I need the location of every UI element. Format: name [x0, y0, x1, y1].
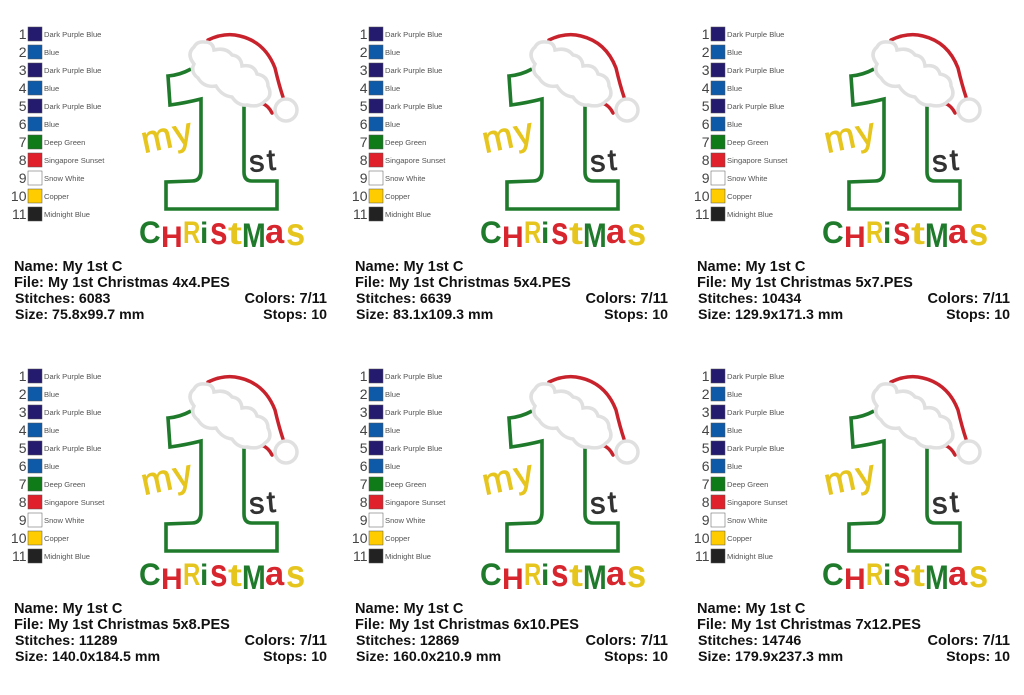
colour legend: Singapore Sunset: [385, 498, 446, 507]
embroidery artwork: H: [161, 563, 183, 596]
embroidery artwork: a: [606, 213, 626, 251]
colour legend: 1: [360, 368, 368, 384]
design details: Colors: 7/11: [245, 633, 327, 649]
design details: Stops: 10: [604, 307, 668, 323]
colour legend: Snow White: [44, 516, 85, 525]
colour legend: Blue: [44, 390, 59, 399]
colour legend: 3: [19, 62, 27, 78]
colour legend: 6: [702, 116, 710, 132]
embroidery artwork: R: [183, 215, 200, 250]
design details: [14, 259, 327, 323]
colour legend: 11: [695, 548, 710, 564]
colour legend: 7: [702, 476, 710, 492]
design details: File: My 1st Christmas 7x12.PES: [697, 617, 921, 633]
embroidery artwork: s: [627, 552, 646, 595]
design details: Size: 179.9x237.3 mm: [698, 649, 843, 665]
colour legend: Deep Green: [727, 138, 768, 147]
colour legend: Dark Purple Blue: [385, 66, 442, 75]
design details: Size: 129.9x171.3 mm: [698, 307, 843, 323]
design details: Colors: 7/11: [586, 291, 668, 307]
embroidery artwork: t: [569, 215, 583, 251]
colour legend: 5: [360, 440, 368, 456]
embroidery artwork: t: [911, 215, 925, 251]
panel: design 5x4: [352, 26, 668, 323]
design details: [697, 601, 1010, 665]
colour legend: Midnight Blue: [385, 552, 431, 561]
embroidery artwork: R: [524, 557, 541, 592]
colour legend: 8: [19, 152, 27, 168]
colour legend: [11, 368, 105, 564]
colour legend: Blue: [385, 48, 400, 57]
embroidery artwork: s: [969, 210, 988, 253]
design details: Stitches: 10434: [698, 291, 801, 307]
embroidery artwork: C: [480, 214, 502, 250]
colour legend: Snow White: [385, 516, 426, 525]
design details: File: My 1st Christmas 5x7.PES: [697, 275, 913, 291]
colour legend: 3: [360, 404, 368, 420]
colour legend: Dark Purple Blue: [385, 30, 442, 39]
colour legend: Dark Purple Blue: [44, 30, 101, 39]
design details: Name: My 1st C: [14, 259, 123, 275]
embroidery artwork: i: [883, 559, 891, 592]
embroidery artwork: t: [911, 557, 925, 593]
embroidery artwork: my: [478, 452, 539, 503]
design details: [355, 601, 668, 665]
embroidery artwork: s: [286, 210, 305, 253]
embroidery artwork: C: [139, 556, 161, 592]
design details: Stops: 10: [604, 649, 668, 665]
embroidery artwork: M: [583, 215, 607, 255]
embroidery artwork: my: [478, 110, 539, 161]
design details: Colors: 7/11: [928, 291, 1010, 307]
colour legend: Blue: [44, 84, 59, 93]
embroidery artwork: s: [210, 551, 228, 595]
colour legend: Blue: [727, 48, 742, 57]
colour legend: 10: [11, 530, 27, 546]
colour legend: Blue: [385, 426, 400, 435]
colour legend: 5: [702, 440, 710, 456]
colour legend: 4: [360, 80, 368, 96]
colour legend: 8: [702, 152, 710, 168]
colour legend: 9: [702, 170, 710, 186]
colour legend: Dark Purple Blue: [44, 102, 101, 111]
embroidery artwork: [478, 377, 646, 597]
colour legend: Blue: [727, 120, 742, 129]
embroidery artwork: i: [883, 217, 891, 250]
embroidery artwork: i: [541, 217, 549, 250]
colour legend: 4: [702, 422, 710, 438]
embroidery artwork: t: [228, 557, 242, 593]
colour legend: Dark Purple Blue: [727, 444, 784, 453]
colour legend: Blue: [385, 120, 400, 129]
colour legend: Midnight Blue: [727, 210, 773, 219]
colour legend: Dark Purple Blue: [44, 444, 101, 453]
colour legend: 5: [19, 98, 27, 114]
embroidery artwork: [820, 35, 988, 255]
colour legend: 1: [19, 26, 27, 42]
embroidery artwork: s: [551, 209, 569, 253]
embroidery artwork: R: [866, 215, 883, 250]
embroidery artwork: t: [569, 557, 583, 593]
embroidery artwork: i: [200, 217, 208, 250]
design details: File: My 1st Christmas 5x8.PES: [14, 617, 230, 633]
colour legend: Dark Purple Blue: [385, 408, 442, 417]
embroidery artwork: R: [524, 215, 541, 250]
colour legend: Singapore Sunset: [44, 156, 105, 165]
colour legend: 3: [702, 404, 710, 420]
colour legend: 8: [360, 494, 368, 510]
colour legend: Midnight Blue: [727, 552, 773, 561]
design details: File: My 1st Christmas 6x10.PES: [355, 617, 579, 633]
colour legend: 1: [360, 26, 368, 42]
colour legend: [694, 368, 788, 564]
colour legend: 8: [702, 494, 710, 510]
colour legend: 6: [360, 458, 368, 474]
colour legend: 7: [360, 476, 368, 492]
colour legend: Blue: [385, 390, 400, 399]
embroidery artwork: st: [931, 144, 963, 179]
colour legend: Deep Green: [44, 138, 85, 147]
colour legend: Dark Purple Blue: [44, 372, 101, 381]
colour legend: 6: [702, 458, 710, 474]
embroidery artwork: s: [627, 210, 646, 253]
colour legend: Deep Green: [385, 138, 426, 147]
colour legend: Snow White: [385, 174, 426, 183]
colour legend: Blue: [727, 390, 742, 399]
colour legend: Dark Purple Blue: [385, 444, 442, 453]
embroidery artwork: C: [480, 556, 502, 592]
colour legend: Dark Purple Blue: [385, 372, 442, 381]
colour legend: Dark Purple Blue: [44, 408, 101, 417]
embroidery artwork: t: [228, 215, 242, 251]
colour legend: [694, 26, 788, 222]
colour legend: 5: [19, 440, 27, 456]
colour legend: 2: [360, 44, 368, 60]
embroidery artwork: my: [137, 452, 198, 503]
colour legend: Deep Green: [44, 480, 85, 489]
colour legend: Midnight Blue: [44, 552, 90, 561]
colour legend: 8: [360, 152, 368, 168]
colour legend: Singapore Sunset: [44, 498, 105, 507]
embroidery artwork: [137, 35, 305, 255]
embroidery artwork: s: [286, 552, 305, 595]
colour legend: Blue: [727, 84, 742, 93]
colour legend: Singapore Sunset: [727, 498, 788, 507]
embroidery artwork: [137, 377, 305, 597]
colour legend: Copper: [385, 534, 410, 543]
embroidery artwork: i: [541, 559, 549, 592]
colour legend: Copper: [44, 192, 69, 201]
design details: [14, 601, 327, 665]
colour legend: Dark Purple Blue: [727, 372, 784, 381]
design details: Stitches: 6639: [356, 291, 452, 307]
design details: Stitches: 11289: [15, 633, 118, 649]
panel: design 6x10: [352, 368, 668, 665]
panel: design 5x7: [694, 26, 1010, 323]
embroidery artwork: [478, 35, 646, 255]
colour legend: 9: [19, 512, 27, 528]
embroidery artwork: a: [948, 555, 968, 593]
colour legend: Dark Purple Blue: [385, 102, 442, 111]
colour legend: 6: [19, 458, 27, 474]
colour legend: Midnight Blue: [44, 210, 90, 219]
embroidery artwork: R: [866, 557, 883, 592]
colour legend: Blue: [44, 462, 59, 471]
colour legend: Dark Purple Blue: [727, 102, 784, 111]
colour legend: 9: [19, 170, 27, 186]
design details: Name: My 1st C: [355, 601, 464, 617]
panel: design 5x8: [11, 368, 327, 665]
embroidery artwork: M: [925, 215, 949, 255]
colour legend: Copper: [727, 534, 752, 543]
design details: Size: 83.1x109.3 mm: [356, 307, 493, 323]
colour legend: 10: [694, 530, 710, 546]
design details: Stops: 10: [946, 307, 1010, 323]
colour legend: 1: [19, 368, 27, 384]
embroidery artwork: st: [248, 486, 280, 521]
colour legend: Singapore Sunset: [727, 156, 788, 165]
embroidery artwork: i: [200, 559, 208, 592]
colour legend: 7: [19, 134, 27, 150]
colour legend: 11: [12, 206, 27, 222]
design details: Stops: 10: [263, 649, 327, 665]
panel: design 7x12: [694, 368, 1010, 665]
colour legend: Blue: [44, 48, 59, 57]
colour legend: 1: [702, 368, 710, 384]
colour legend: 3: [19, 404, 27, 420]
colour legend: 10: [11, 188, 27, 204]
colour legend: 9: [702, 512, 710, 528]
design details: Stitches: 14746: [698, 633, 801, 649]
colour legend: [352, 26, 446, 222]
embroidery artwork: H: [502, 563, 524, 596]
embroidery artwork: M: [925, 557, 949, 597]
embroidery artwork: H: [844, 563, 866, 596]
embroidery artwork: st: [248, 144, 280, 179]
design details: [355, 259, 668, 323]
embroidery artwork: M: [242, 557, 266, 597]
colour legend: 11: [353, 548, 368, 564]
colour legend: Blue: [385, 462, 400, 471]
colour legend: Blue: [44, 426, 59, 435]
colour legend: 11: [695, 206, 710, 222]
colour legend: Dark Purple Blue: [727, 30, 784, 39]
colour legend: 3: [702, 62, 710, 78]
embroidery artwork: H: [502, 221, 524, 254]
colour legend: 6: [19, 116, 27, 132]
embroidery artwork: st: [589, 144, 621, 179]
colour legend: 7: [360, 134, 368, 150]
embroidery artwork: C: [139, 214, 161, 250]
colour legend: Blue: [727, 462, 742, 471]
colour legend: 10: [352, 530, 368, 546]
colour legend: Copper: [44, 534, 69, 543]
design details: Colors: 7/11: [928, 633, 1010, 649]
colour legend: Copper: [385, 192, 410, 201]
colour legend: 10: [694, 188, 710, 204]
embroidery artwork: M: [583, 557, 607, 597]
colour legend: 4: [19, 80, 27, 96]
design details: Stops: 10: [263, 307, 327, 323]
design details: Colors: 7/11: [245, 291, 327, 307]
embroidery artwork: a: [265, 555, 285, 593]
colour legend: Deep Green: [385, 480, 426, 489]
embroidery artwork: C: [822, 214, 844, 250]
colour legend: 2: [19, 44, 27, 60]
design details: Colors: 7/11: [586, 633, 668, 649]
colour legend: Snow White: [44, 174, 85, 183]
embroidery artwork: s: [969, 552, 988, 595]
colour legend: 1: [702, 26, 710, 42]
colour legend: 4: [360, 422, 368, 438]
design details: Name: My 1st C: [355, 259, 464, 275]
colour legend: Blue: [727, 426, 742, 435]
design details: File: My 1st Christmas 5x4.PES: [355, 275, 571, 291]
colour legend: Blue: [44, 120, 59, 129]
embroidery artwork: C: [822, 556, 844, 592]
colour legend: 3: [360, 62, 368, 78]
colour legend: 5: [702, 98, 710, 114]
design details: Name: My 1st C: [14, 601, 123, 617]
colour legend: Dark Purple Blue: [727, 66, 784, 75]
colour legend: 11: [12, 548, 27, 564]
embroidery artwork: H: [844, 221, 866, 254]
colour legend: Dark Purple Blue: [44, 66, 101, 75]
embroidery artwork: my: [820, 452, 881, 503]
colour legend: 2: [702, 44, 710, 60]
design details: Name: My 1st C: [697, 601, 806, 617]
embroidery artwork: [820, 377, 988, 597]
colour legend: 7: [19, 476, 27, 492]
colour legend: [11, 26, 105, 222]
embroidery artwork: a: [265, 213, 285, 251]
embroidery artwork: my: [137, 110, 198, 161]
colour legend: 6: [360, 116, 368, 132]
colour legend: Snow White: [727, 516, 768, 525]
colour legend: Copper: [727, 192, 752, 201]
embroidery artwork: st: [589, 486, 621, 521]
colour legend: Blue: [385, 84, 400, 93]
colour legend: Midnight Blue: [385, 210, 431, 219]
embroidery artwork: R: [183, 557, 200, 592]
design details: Size: 75.8x99.7 mm: [15, 307, 144, 323]
design details: Size: 160.0x210.9 mm: [356, 649, 501, 665]
design details: Stitches: 6083: [15, 291, 111, 307]
colour legend: Dark Purple Blue: [727, 408, 784, 417]
colour legend: [352, 368, 446, 564]
embroidery artwork: s: [551, 551, 569, 595]
design details: Stitches: 12869: [356, 633, 459, 649]
colour legend: 7: [702, 134, 710, 150]
embroidery artwork: H: [161, 221, 183, 254]
colour legend: 2: [19, 386, 27, 402]
colour legend: 2: [702, 386, 710, 402]
design details: Name: My 1st C: [697, 259, 806, 275]
colour legend: Snow White: [727, 174, 768, 183]
embroidery artwork: s: [893, 209, 911, 253]
embroidery artwork: s: [893, 551, 911, 595]
colour legend: 2: [360, 386, 368, 402]
embroidery artwork: M: [242, 215, 266, 255]
embroidery artwork: a: [606, 555, 626, 593]
colour legend: Deep Green: [727, 480, 768, 489]
colour legend: 4: [702, 80, 710, 96]
colour legend: 5: [360, 98, 368, 114]
design details: [697, 259, 1010, 323]
embroidery artwork: st: [931, 486, 963, 521]
panel: design 4x4: [11, 26, 327, 323]
colour legend: Singapore Sunset: [385, 156, 446, 165]
colour legend: 10: [352, 188, 368, 204]
colour legend: 8: [19, 494, 27, 510]
embroidery artwork: a: [948, 213, 968, 251]
design details: File: My 1st Christmas 4x4.PES: [14, 275, 230, 291]
embroidery artwork: s: [210, 209, 228, 253]
design details: Stops: 10: [946, 649, 1010, 665]
design details: Size: 140.0x184.5 mm: [15, 649, 160, 665]
colour legend: 9: [360, 512, 368, 528]
colour legend: 9: [360, 170, 368, 186]
colour legend: 11: [353, 206, 368, 222]
colour legend: 4: [19, 422, 27, 438]
embroidery artwork: my: [820, 110, 881, 161]
